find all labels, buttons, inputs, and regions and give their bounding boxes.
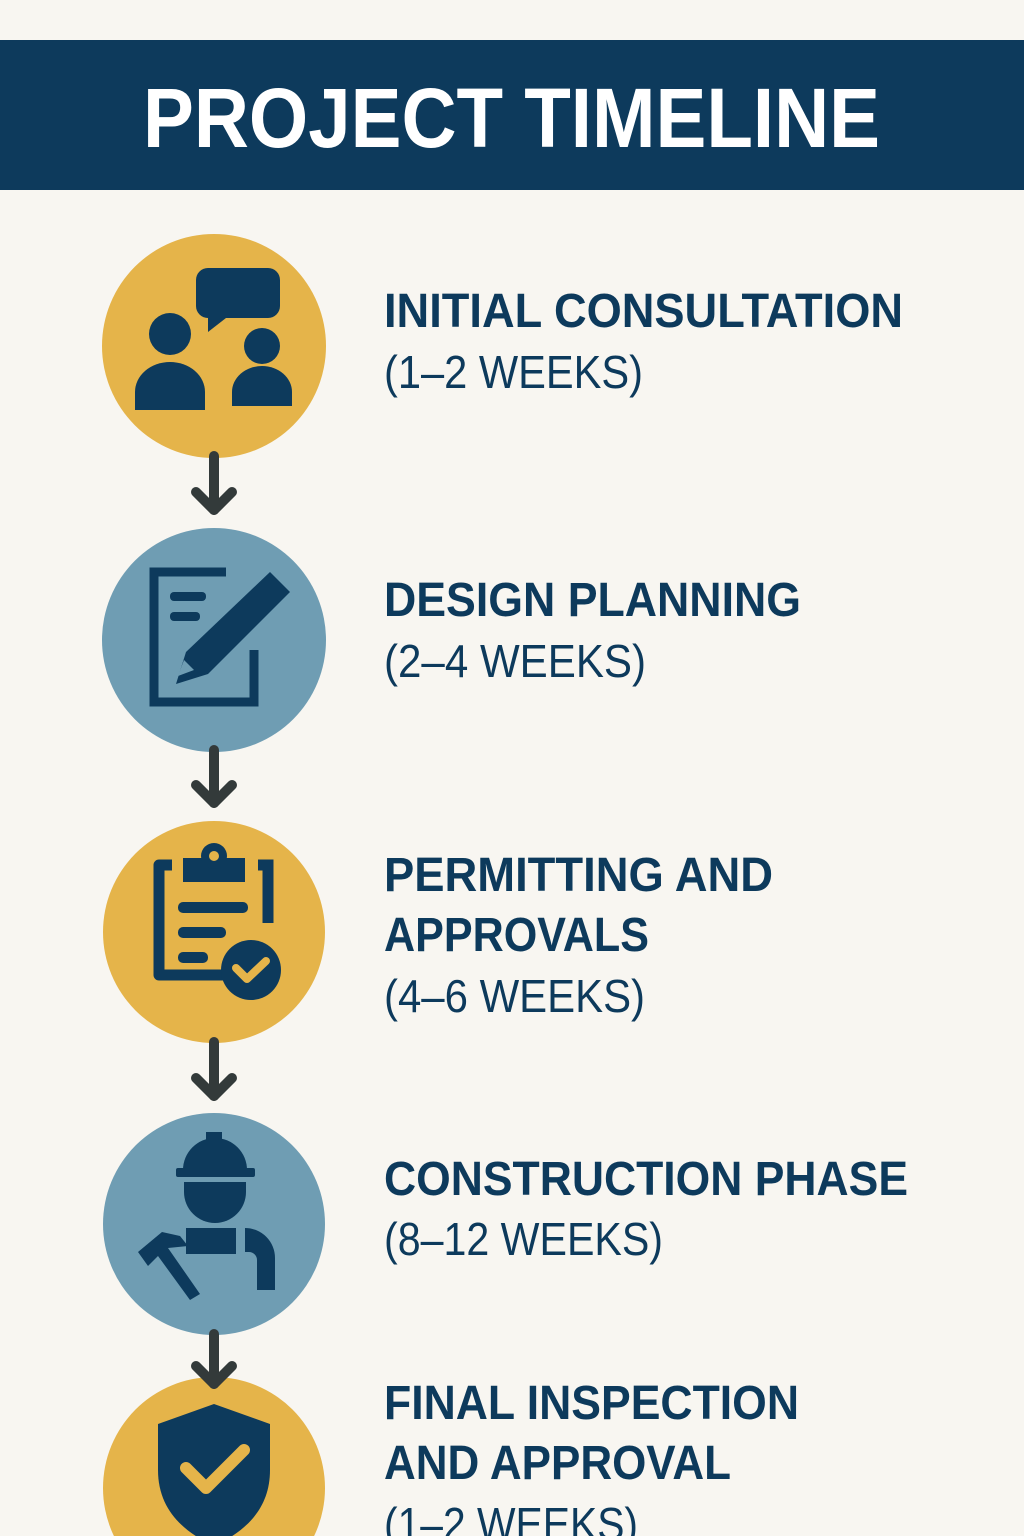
arrow 1 <box>196 456 232 510</box>
step 4 text: CONSTRUCTION PHASE <box>384 1153 908 1206</box>
step 3 text <box>384 849 773 1022</box>
arrow 2 <box>196 750 232 803</box>
icon: construction worker <box>103 1113 325 1335</box>
step 3 text: (4–6 WEEKS) <box>384 970 645 1022</box>
step 2 text <box>384 574 801 687</box>
title bar: PROJECT TIMELINE <box>143 71 880 165</box>
step 5 text: FINAL INSPECTION <box>384 1377 799 1430</box>
step 2 text: (2–4 WEEKS) <box>384 635 646 687</box>
icon: design document pencil <box>102 528 326 752</box>
step 4 text: (8–12 WEEKS) <box>384 1213 663 1265</box>
step 2 text: DESIGN PLANNING <box>384 574 801 627</box>
step 3 text: PERMITTING AND <box>384 849 773 902</box>
icon: consultation people <box>102 234 326 458</box>
step 1 text <box>384 285 903 398</box>
step 1 text: (1–2 WEEKS) <box>384 346 643 398</box>
step 5 text: AND APPROVAL <box>384 1437 731 1490</box>
step 3 text: APPROVALS <box>384 909 649 962</box>
step 1 text: INITIAL CONSULTATION <box>384 285 903 338</box>
icon: shield check <box>103 1377 325 1536</box>
step 5 text <box>384 1377 799 1536</box>
arrow 4 <box>196 1334 232 1384</box>
icon: clipboard check <box>103 821 325 1043</box>
arrow 3 <box>196 1042 232 1096</box>
title bar <box>0 40 1024 190</box>
step 4 text <box>384 1153 908 1265</box>
